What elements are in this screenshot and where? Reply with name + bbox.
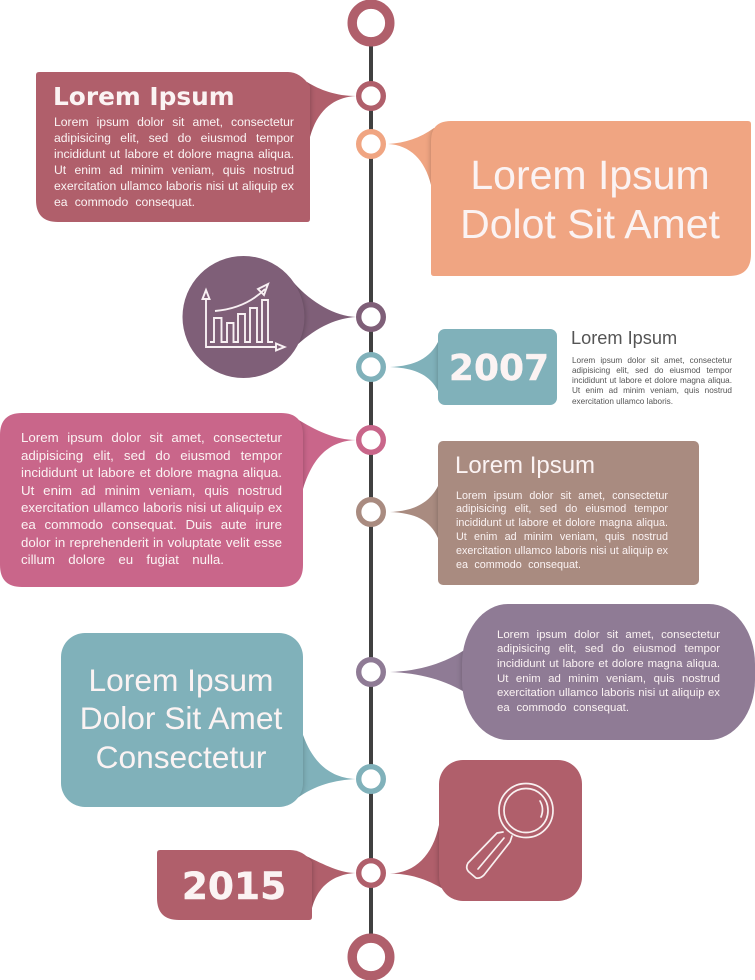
node: top end [352,4,390,42]
panel: text, purple [390,604,755,740]
body text: Ut enim ad minim veniam, quis nostrud [497,673,720,685]
body text: ea commodo consequat. Duis aute irure [21,517,282,532]
body text: adipisicing elit, sed do eiusmod tempor [54,131,294,145]
body text: incididunt ut labore et dolore magna aliqua. [21,465,282,480]
node: purple [359,660,383,684]
panel: magnifier icon box [390,760,582,901]
body text: adipisicing elit, sed do eiusmod tempor [21,448,282,463]
body text: Ut enim ad minim veniam, quis nostrud [456,531,668,543]
body text: incididunt ut labore et dolore magna aliqua. [497,658,720,670]
node: pink [359,428,383,452]
panel: heading and text, red [36,72,356,222]
body text: incididunt ut labore et dolore magna aliqua. [54,147,294,161]
node: plum [359,305,383,329]
year: 2015 [182,864,286,908]
heading: Lorem Ipsum [455,452,595,478]
body text: ea commodo consequat. [456,559,581,571]
body text: incididunt ut labore et dolore magna aliqua. [572,376,732,385]
title text: Dolot Sit Amet [460,201,720,247]
body text [497,629,720,714]
body text: incididunt ut labore et dolore magna aliqua. [456,517,668,529]
body text: exercitation ullamco laboris nisi ut aliquip ex [21,500,282,515]
text block: grey heading and note [571,328,732,406]
body text: dolor in reprehenderit in voluptate velit esse [21,535,282,550]
icon: bar chart with rising arrow [202,284,284,350]
title text [80,662,282,775]
body text: Lorem ipsum dolor sit amet, consectetur [497,629,720,641]
body text [572,356,732,406]
panel: three-line title, teal [61,633,356,807]
node: teal lower [359,767,383,791]
icon: magnifying glass [467,784,553,878]
panel: heading and text, brown [390,441,699,585]
panel: chart icon circle [182,256,356,378]
body text: Ut enim ad minim veniam, quis nostrud [21,483,282,498]
heading: Lorem Ipsum [571,328,677,348]
node: bottom end [352,938,390,976]
body text: exercitation ullamco laboris nisi ut aliquip ex [497,687,720,699]
year: 2007 [449,348,549,389]
panel: long text, pink [0,413,356,587]
title text: Dolor Sit Amet [80,700,282,736]
title text: Consectetur [96,739,266,775]
body text: Lorem ipsum dolor sit amet, consectetur [54,115,294,129]
body text [456,490,668,571]
body text: ea commodo consequat. [497,702,629,714]
panel: year 2007, teal [390,329,557,405]
heading: Lorem Ipsum [53,82,235,111]
body text: adipisicing elit, sed do eiusmod tempor [572,366,732,375]
body text: adipisicing elit, sed do eiusmod tempor [497,643,720,655]
title text [460,152,720,247]
body text: Lorem ipsum dolor sit amet, consectetur [21,430,282,445]
body text: cillum dolore eu fugiat nulla. [21,552,224,567]
body text: Lorem ipsum dolor sit amet, consectetur [456,490,668,502]
title text: Lorem Ipsum [89,662,273,698]
node: red lower [359,861,383,885]
body text [54,115,294,209]
title text: Lorem Ipsum [470,152,710,198]
body text: Ut enim ad minim veniam, quis nostrud [572,386,732,395]
body text: exercitation ullamco laboris nisi ut aliquip ex [54,179,294,193]
body text: ea commodo consequat. [54,195,195,209]
body text: Ut enim ad minim veniam, quis nostrud [54,163,294,177]
body text [21,430,282,567]
node: red [359,84,383,108]
panel: large title, orange [388,121,751,276]
body text: exercitation ullamco laboris nisi ut aliquip ex [456,545,668,557]
node: teal [359,355,383,379]
body text: exercitation ullamco laboris. [572,397,673,406]
node: orange [359,132,383,156]
body text: Lorem ipsum dolor sit amet, consectetur [572,356,732,364]
node: brown [359,500,383,524]
body text: adipisicing elit, sed do eiusmod tempor [456,503,668,515]
panel: year 2015, red [157,850,356,920]
